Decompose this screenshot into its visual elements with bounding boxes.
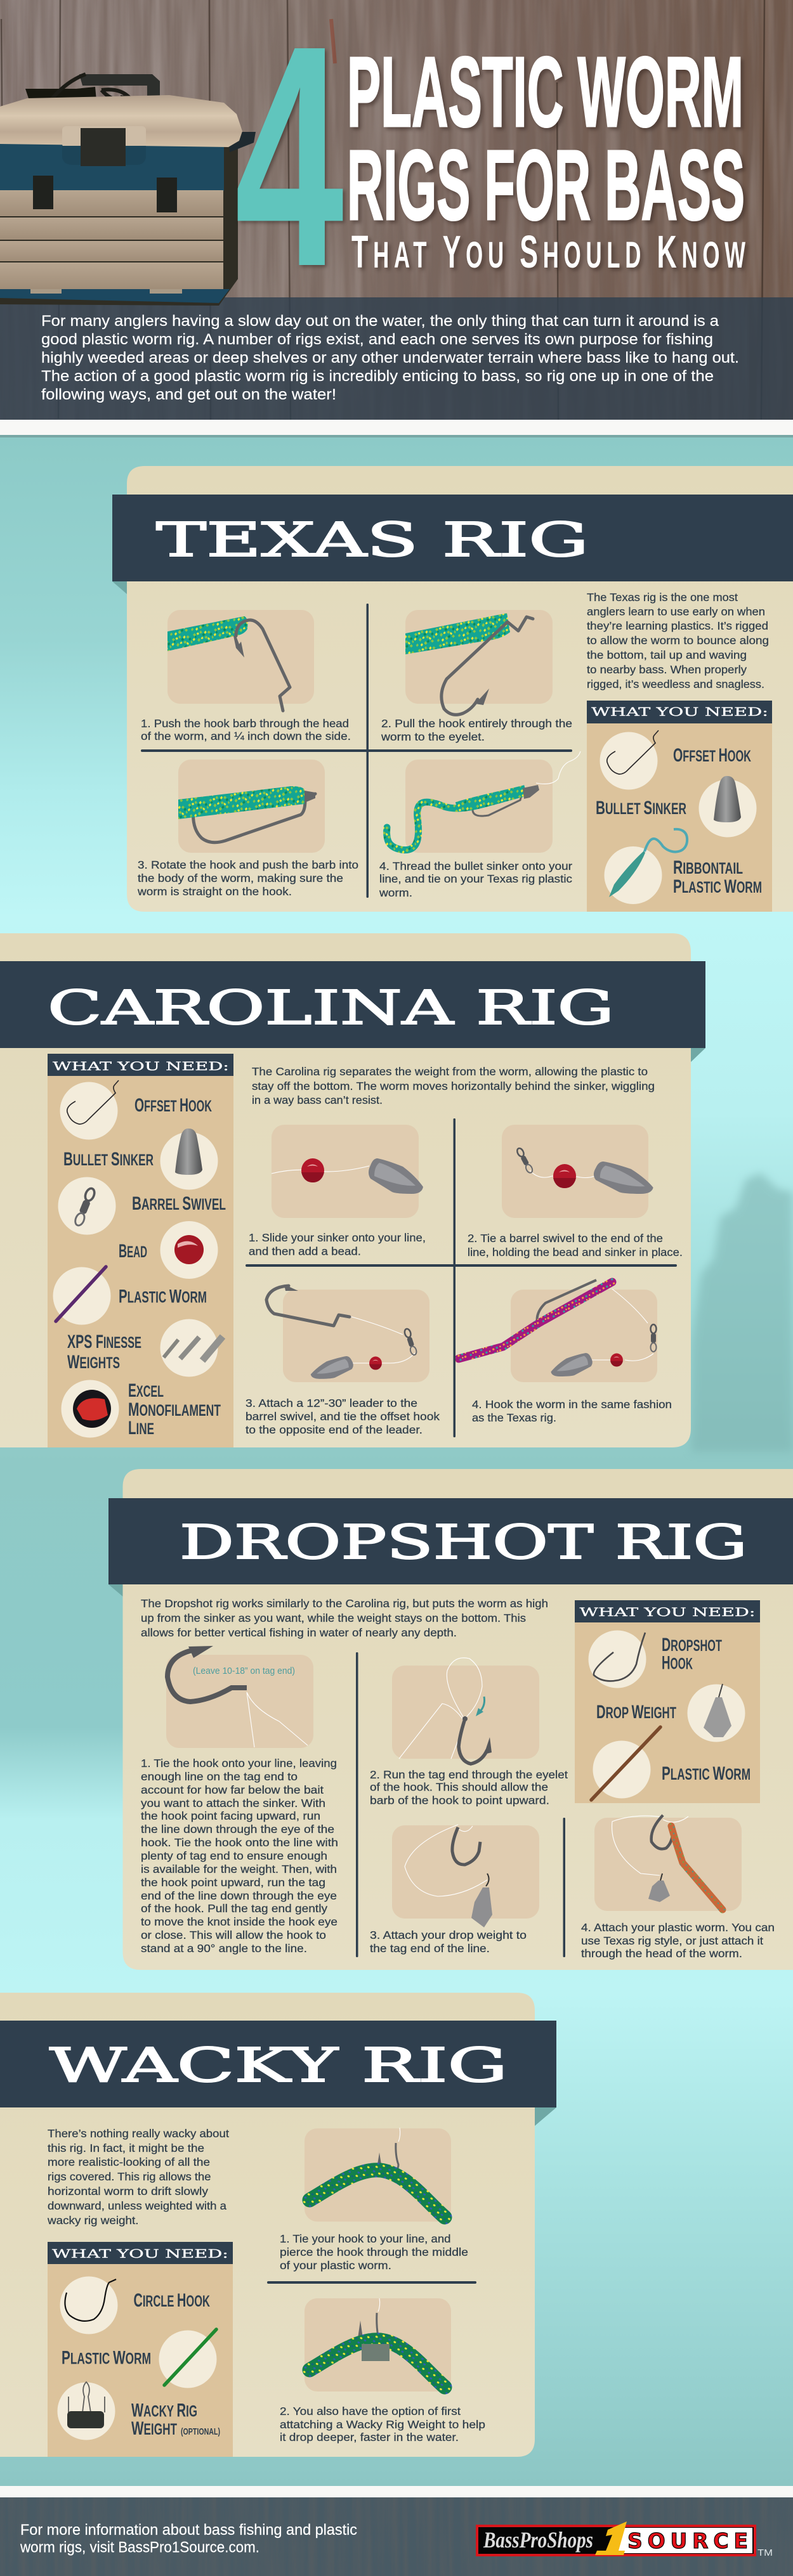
footer: For more information about bass fishing and plastic (20, 2521, 357, 2539)
background: teal water (0, 435, 793, 2486)
step 4: Dropshot: use Texas rig style, or just attach it (581, 1934, 763, 1947)
step 2: Texas (381, 610, 572, 743)
footer: worm rigs, visit BassPro1Source.com. (20, 2539, 259, 2556)
Dropshot rig description: The Dropshot rig works similarly to the Carolina rig, but puts the worm as high (141, 1597, 548, 1610)
logo: Bass Pro Shops 1 Source: SOURCE (627, 2528, 748, 2553)
step 3: Texas: 3. Rotate the hook and push the barb into (138, 858, 358, 871)
step 2: Wacky (280, 2298, 485, 2443)
step 3: Dropshot: 3. Attach your drop weight to (370, 1929, 527, 1941)
toolbox illustration (0, 74, 256, 306)
step 1: Dropshot: stand at a 90° angle to the line. (141, 1942, 307, 1955)
banner: Dropshot rig: DROPSHOT RIG (180, 1515, 747, 1570)
what you need: Dropshot: HOOK (662, 1652, 693, 1674)
step 1: Dropshot: hook. Tie the hook onto the line with (141, 1836, 338, 1849)
step 1: Dropshot: is available for the weight. Then, with (141, 1863, 337, 1875)
step 4: Carolina: as the Texas rig. (472, 1411, 556, 1424)
grid dividers (141, 604, 572, 898)
what you need: Carolina: OFFSET HOOK (134, 1095, 212, 1116)
step 2: Texas: worm to the eyelet. (381, 730, 485, 743)
step 4: Dropshot: through the head of the worm. (581, 1947, 742, 1960)
intro band: good plastic worm rig. A number of rigs exist, and each one serves its own purpose for fishing (41, 331, 713, 348)
what you need: Wacky: (OPTIONAL) (181, 2426, 220, 2437)
step 3: Texas (137, 760, 358, 898)
grid dividers (246, 1118, 677, 1437)
what you need: Dropshot: WHAT YOU NEED: (580, 1605, 755, 1619)
step 3: Dropshot (370, 1825, 539, 1955)
logo: Bass Pro Shops 1 Source: TM (757, 2547, 773, 2558)
Wacky rig description: wacky rig weight. (47, 2214, 138, 2227)
step 1: Dropshot: the hook point upward, run the tag (141, 1876, 325, 1889)
step 3: Dropshot: the tag end of the line. (370, 1942, 490, 1955)
step 4: Carolina (459, 1280, 672, 1424)
step 1: Carolina (249, 1125, 426, 1258)
what you need: Texas: BULLET SINKER (596, 798, 686, 819)
step 3: Carolina: 3. Attach a 12”-30” leader to the (246, 1397, 417, 1409)
what you need: Carolina: PLASTIC WORM (119, 1286, 207, 1307)
step 1: Carolina: 1. Slide your sinker onto your line, (249, 1231, 426, 1244)
step 2: Carolina: line, holding the bead and sinker in place. (468, 1246, 683, 1259)
what you need: Carolina: LINE (128, 1418, 154, 1439)
step 2: Wacky: it drop deeper, faster in the water. (280, 2431, 459, 2443)
step 2: Dropshot: of the hook. This should allow the (370, 1780, 548, 1793)
step 1: Wacky: pierce the hook through the middle (280, 2246, 468, 2258)
step 2: Texas: 2. Pull the hook entirely through the (381, 717, 572, 730)
step 4: Dropshot: 4. Attach your plastic worm. You can (581, 1921, 775, 1934)
what you need: Carolina: MONOFILAMENT (128, 1399, 221, 1420)
Wacky rig description: this rig. In fact, it might be the (48, 2142, 204, 2154)
Carolina rig description (252, 1065, 655, 1106)
banner: Texas rig (112, 495, 793, 581)
what you need: Wacky: PLASTIC WORM (62, 2347, 151, 2369)
step 1: Dropshot: of the hook. Pull the tag end gently (141, 1902, 327, 1915)
step 4: Texas: 4. Thread the bullet sinker onto your (379, 860, 572, 872)
Wacky rig description: rigs covered. This rig allows the (48, 2170, 211, 2183)
Texas rig description: anglers learn to use early on when (587, 605, 765, 618)
step 1: Wacky (280, 2128, 468, 2272)
what you need: Wacky: WACKY RIG (131, 2400, 197, 2421)
step 1: Dropshot: (Leave 10-18” on tag end) (193, 1666, 295, 1676)
Wacky rig description: downward, unless weighted with a (48, 2199, 226, 2212)
dividers (356, 1652, 565, 1957)
intro band: For many anglers having a slow day out on the water, the only thing that can turn it around is a (41, 313, 719, 330)
Dropshot rig description (141, 1597, 548, 1639)
what you need: Carolina: WHAT YOU NEED: (53, 1059, 229, 1073)
step 4: Texas: line, and tie on your Texas rig plastic (379, 872, 572, 885)
what you need: Texas (587, 701, 772, 912)
logo: Bass Pro Shops 1 Source: BassProShops (483, 2527, 593, 2553)
intro band: highly weeded areas or deep shelves or any other underwater terrain where bass like to hang out. (41, 349, 739, 366)
intro band: The action of a good plastic worm rig is incredibly enticing to bass, so rig one up in one of the (41, 368, 714, 385)
Wacky rig description: There’s nothing really wacky about (48, 2127, 229, 2140)
Wacky rig description (47, 2127, 229, 2227)
what you need: Carolina (48, 1054, 233, 1447)
step 2: Carolina (468, 1125, 683, 1259)
what you need: Wacky: CIRCLE HOOK (133, 2290, 210, 2311)
step 1: Wacky: 1. Tie your hook to your line, and (280, 2232, 450, 2245)
what you need: Carolina: BULLET SINKER (63, 1149, 154, 1170)
what you need: Wacky: WHAT YOU NEED: (52, 2247, 228, 2261)
step 1: Texas: of the worm, and ¼ inch down the side. (141, 730, 351, 742)
step 1: Texas: 1. Push the hook barb through the head (141, 717, 349, 730)
Texas rig description: rigged, it’s weedless and snagless. (587, 678, 764, 690)
banner: Wacky rig (0, 2021, 556, 2107)
what you need: Wacky (48, 2242, 233, 2457)
step 3: Carolina: to the opposite end of the leader. (246, 1423, 423, 1436)
step 1: Dropshot: to move the knot inside the hook eye (141, 1915, 338, 1928)
step 3: Carolina (246, 1285, 440, 1436)
Carolina rig description: stay off the bottom. The worm moves horizontally behind the sinker, wiggling (252, 1080, 655, 1092)
Carolina rig description: The Carolina rig separates the weight from the worm, allowing the plastic to (252, 1065, 648, 1078)
what you need: Dropshot: PLASTIC WORM (662, 1763, 750, 1784)
step 1: Dropshot: the line down through the eye of the (141, 1823, 334, 1835)
banner: Carolina rig: CAROLINA RIG (48, 981, 614, 1035)
footer (0, 2497, 793, 2576)
banner: Dropshot rig (108, 1498, 793, 1584)
step 4: Texas (379, 751, 580, 899)
step 2: Dropshot: 2. Run the tag end through the eyelet (370, 1768, 568, 1781)
step 4: Dropshot (581, 1815, 775, 1960)
what you need: Texas: RIBBONTAIL (673, 857, 743, 878)
panel: Texas rig (112, 466, 793, 912)
step 1: Dropshot: you want to attach the sinker. With (141, 1797, 325, 1809)
Dropshot rig description: allows for better vertical fishing in water of nearly any depth. (141, 1626, 457, 1639)
step 1: Dropshot: 1. Tie the hook onto your line, leaving (141, 1757, 337, 1770)
Dropshot rig description: up from the sinker as you want, while the weight stays on the bottom. This (141, 1612, 526, 1624)
step 2: Dropshot (370, 1658, 568, 1807)
step 3: Texas: worm is straight on the hook. (137, 885, 292, 898)
what you need: Texas: WHAT YOU NEED: (591, 705, 768, 719)
title: THAT YOU SHOULD KNOW (351, 226, 746, 278)
Texas rig description: to nearby bass. When properly (587, 663, 747, 676)
Wacky rig description: more realistic-looking of all the (48, 2156, 210, 2168)
Wacky rig description: horizontal worm to drift slowly (48, 2185, 208, 2197)
step 1: Dropshot: plenty of tag end to ensure enough (141, 1849, 327, 1862)
step 3: Texas: the body of the worm, making sure the (138, 872, 343, 884)
step 1: Dropshot: or close. This will allow the hook to (141, 1929, 326, 1941)
step 4: Texas: worm. (379, 886, 412, 899)
Texas rig description: they’re learning plastics. It’s rigged (587, 619, 768, 632)
what you need: Texas: PLASTIC WORM (673, 876, 762, 897)
step 2: Carolina: 2. Tie a barrel swivel to the end of the (468, 1232, 663, 1245)
Texas rig description: to allow the worm to bounce along (587, 634, 769, 647)
Texas rig description: the bottom, tail up and waving (587, 649, 747, 661)
step 1: Dropshot: account for how far below the bait (141, 1783, 324, 1796)
banner: Carolina rig (0, 961, 705, 1048)
what you need: Carolina: BEAD (119, 1241, 147, 1262)
step 1: Dropshot: the hook point facing upward, run (141, 1809, 320, 1822)
what you need: Wacky: WEIGHT (131, 2418, 177, 2439)
panel: Dropshot rig (108, 1469, 793, 1970)
intro band: following ways, and get out on the water! (41, 386, 336, 403)
header: wood background (0, 0, 793, 420)
step 1: Dropshot: end of the line down through the eye (141, 1889, 337, 1902)
white strip (0, 420, 793, 437)
what you need: Carolina: EXCEL (128, 1380, 164, 1401)
Carolina rig description: in a way bass can’t resist. (252, 1094, 383, 1106)
Texas rig description: The Texas rig is the one most (587, 591, 738, 604)
banner: Wacky rig: WACKY RIG (49, 2038, 508, 2093)
what you need: Dropshot (575, 1600, 760, 1803)
step 2: Dropshot: barb of the hook to point upward. (370, 1794, 549, 1807)
title (347, 37, 746, 278)
what you need: Carolina: WEIGHTS (67, 1352, 120, 1373)
step 4: Carolina: 4. Hook the worm in the same fashion (472, 1398, 672, 1411)
what you need: Carolina: BARREL SWIVEL (132, 1193, 226, 1214)
tree silhouette (691, 1173, 793, 1452)
white strip above footer (0, 2486, 793, 2497)
step 1: Texas (141, 610, 351, 742)
step 1: Dropshot (141, 1646, 338, 1955)
what you need: Carolina: XPS FINESSE (67, 1331, 141, 1352)
what you need: Dropshot: DROPSHOT (662, 1634, 722, 1655)
logo: Bass Pro Shops 1 Source (476, 2521, 773, 2558)
Texas rig description (587, 591, 769, 690)
banner: Texas rig: TEXAS RIG (156, 513, 589, 567)
intro band (0, 297, 793, 420)
step 1: Dropshot: enough line on the tag end to (141, 1770, 298, 1783)
panel: Wacky rig (0, 1993, 556, 2457)
step 2: Wacky: 2. You also have the option of first (280, 2405, 461, 2417)
step 1: Carolina: and then add a bead. (249, 1245, 361, 1258)
step 2: Wacky: attatching a Wacky Rig Weight to help (280, 2418, 485, 2431)
step 3: Carolina: barrel swivel, and tie the offset hook (246, 1410, 440, 1423)
step 1: Wacky: of your plastic worm. (280, 2259, 391, 2272)
divider (267, 2281, 476, 2284)
panel: Carolina rig (0, 933, 705, 1447)
what you need: Dropshot: DROP WEIGHT (596, 1702, 676, 1723)
what you need: Texas: OFFSET HOOK (673, 745, 751, 766)
